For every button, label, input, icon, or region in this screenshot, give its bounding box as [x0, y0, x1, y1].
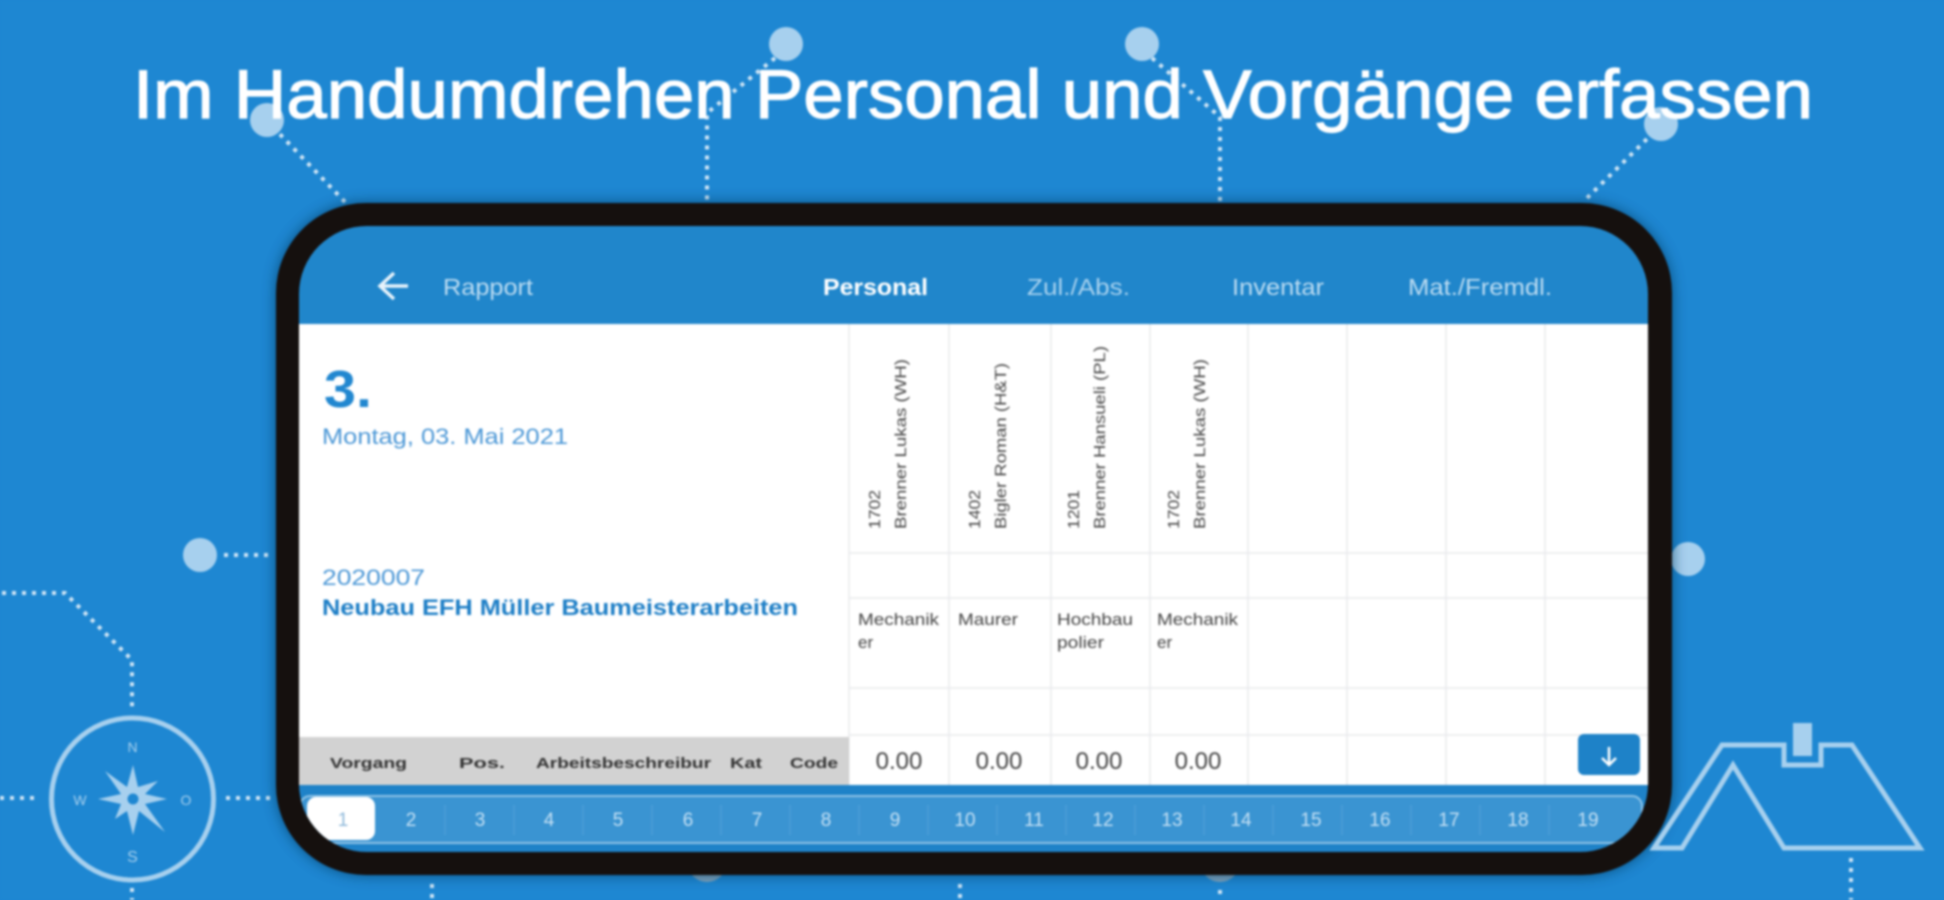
- column header labels: Vorgang: [330, 755, 407, 772]
- employee column 3: 1201: [1066, 490, 1083, 529]
- employee column 1: 1702: [867, 490, 884, 529]
- icon: back arrow: [380, 273, 408, 299]
- nav: Inventar: Inventar: [1232, 274, 1324, 300]
- employee column 1: [867, 359, 910, 529]
- column header labels: Pos.: [459, 755, 505, 772]
- job titles: Hochbau: [1057, 610, 1133, 629]
- tab numbers: 7: [752, 810, 762, 831]
- tab numbers: 17: [1438, 810, 1460, 831]
- tab numbers: 18: [1507, 810, 1529, 831]
- node behind phone: bottom centre right: [1200, 842, 1240, 882]
- nav: Personal: Personal: [823, 274, 928, 300]
- date: Montag, 03. Mai 2021: [322, 424, 568, 449]
- job titles: Mechanik: [1157, 610, 1239, 629]
- nav: Rapport: Rapport: [443, 274, 534, 300]
- day number: 3.: [324, 361, 372, 419]
- connector node: middle left: [183, 538, 217, 572]
- tab numbers: 3: [475, 810, 485, 831]
- grey column header bar: [299, 737, 849, 785]
- content area: [299, 324, 1648, 785]
- connector node: top right: [1644, 107, 1678, 141]
- tab numbers: 14: [1230, 810, 1252, 831]
- column header labels: Code: [790, 755, 838, 772]
- active tab: [307, 797, 375, 840]
- employee column 2: Bigler Roman (H&T): [993, 363, 1010, 529]
- app header bar: [299, 226, 1648, 324]
- employee column 4: 1702: [1166, 490, 1183, 529]
- tab numbers: 16: [1369, 810, 1391, 831]
- icon: compass: [52, 718, 214, 880]
- icon: house: [1654, 723, 1920, 848]
- tab numbers: 4: [544, 810, 555, 831]
- column header labels: [330, 755, 838, 772]
- connector node: top left: [250, 103, 284, 137]
- employee column 2: [967, 363, 1010, 529]
- tab numbers: 1: [338, 810, 348, 831]
- job titles: er: [1157, 633, 1172, 652]
- screen: [299, 226, 1648, 852]
- totals row: [876, 748, 1221, 775]
- tab numbers: 15: [1300, 810, 1322, 831]
- totals row: 0.00: [1175, 748, 1221, 775]
- icon: compass: O: [181, 792, 192, 808]
- employee column 4: [1166, 359, 1209, 529]
- employee column 3: Brenner Hansueli (PL): [1092, 346, 1109, 529]
- employee column 4: Brenner Lukas (WH): [1192, 359, 1209, 529]
- totals row: 0.00: [1076, 748, 1122, 775]
- job titles: polier: [1057, 633, 1104, 652]
- tab numbers: 9: [890, 810, 900, 831]
- node behind phone: bottom centre left: [687, 842, 727, 882]
- column header labels: Kat: [730, 755, 762, 772]
- employee column 2: 1402: [967, 490, 984, 529]
- phone frame: [276, 203, 1672, 875]
- phone: [276, 203, 1672, 875]
- column header labels: Arbeitsbeschreibur: [536, 755, 711, 772]
- title: Im Handumdrehen Personal und Vorgänge erfassen: [133, 56, 1813, 133]
- tab numbers: 13: [1161, 810, 1183, 831]
- job titles: Mechanik: [858, 610, 940, 629]
- icon: compass: S: [127, 849, 138, 866]
- connector node: top centre left: [769, 27, 803, 61]
- job titles: er: [858, 633, 873, 652]
- totals row: 0.00: [876, 748, 922, 775]
- tab numbers: 8: [821, 810, 831, 831]
- tab numbers: 5: [613, 810, 623, 831]
- nav: Zul./Abs.: Zul./Abs.: [1027, 274, 1130, 300]
- icon: compass: W: [73, 792, 87, 808]
- icon: compass: N: [127, 739, 138, 755]
- tab numbers: 19: [1577, 810, 1599, 831]
- employee column 1: Brenner Lukas (WH): [893, 359, 910, 529]
- connector node: top centre right: [1125, 27, 1159, 61]
- project number: 2020007: [322, 565, 425, 590]
- nav: Mat./Fremdl.: Mat./Fremdl.: [1408, 274, 1552, 300]
- employee column 3: [1066, 346, 1109, 529]
- tab numbers: 11: [1024, 810, 1044, 831]
- job titles: Maurer: [958, 610, 1018, 629]
- project name: Neubau EFH Müller Baumeisterarbeiten: [322, 595, 798, 620]
- scroll down button: [1578, 734, 1640, 775]
- tab numbers: 10: [954, 810, 976, 831]
- tab numbers: 2: [406, 810, 416, 831]
- table grid: [849, 324, 1648, 785]
- tab separators: [445, 805, 1549, 835]
- tab strip: [300, 796, 1642, 843]
- job titles: [858, 610, 1239, 652]
- tab numbers: [338, 810, 1599, 831]
- tab numbers: 12: [1092, 810, 1114, 831]
- connector node: middle right: [1671, 542, 1705, 576]
- totals row: 0.00: [976, 748, 1022, 775]
- bottom tab area: [299, 785, 1648, 852]
- phone shadow: [276, 203, 1672, 875]
- tab numbers: 6: [683, 810, 693, 831]
